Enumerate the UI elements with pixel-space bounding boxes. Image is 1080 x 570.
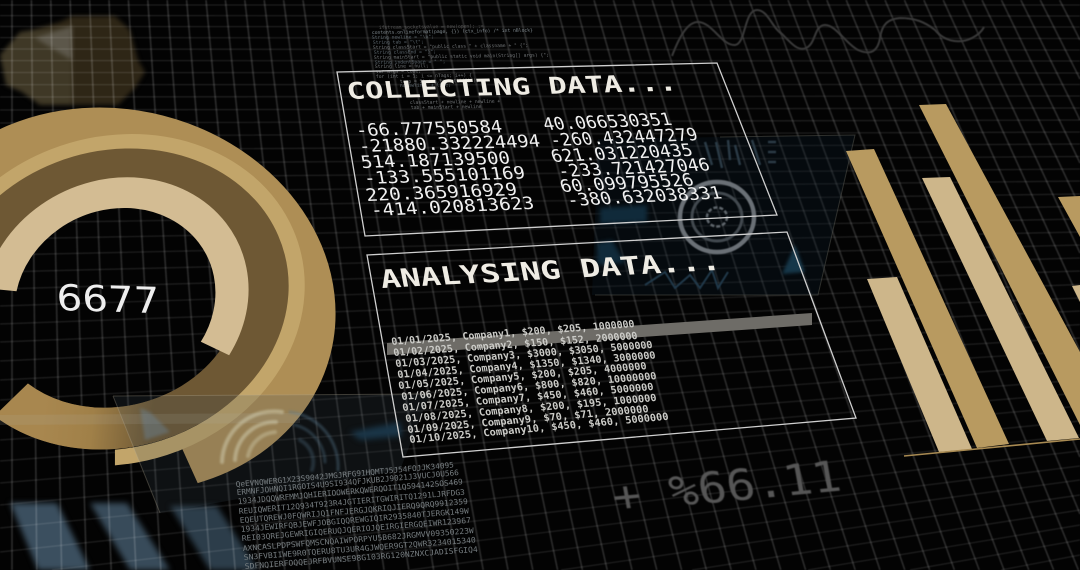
random data text block bottom centre bbox=[235, 460, 479, 570]
donut value: 6677 bbox=[56, 278, 160, 322]
ring: outer gold band bbox=[0, 81, 357, 519]
top-left faded gold blob bbox=[0, 16, 145, 105]
heading: collecting data: COLLECTING DATA... bbox=[345, 71, 679, 105]
small code text top centre: String mainStart = "public static void main(String[] args) {"; bbox=[374, 52, 549, 61]
bar: tall gold 2 bbox=[919, 104, 1080, 425]
ring: light gold band bbox=[0, 97, 355, 503]
small code text top centre: String indentSpace = " "; bbox=[375, 59, 446, 66]
bar: light 1 bbox=[867, 277, 972, 452]
small code text top centre: String newline = "\n"; bbox=[372, 34, 434, 41]
small code text top centre: tab + mainStart + newline bbox=[411, 104, 482, 111]
panel: analysing data bbox=[367, 232, 856, 457]
small code text top centre: for (int i = 1; i <= nTags; i++) { bbox=[376, 73, 472, 80]
wave line top right bbox=[672, 10, 984, 56]
ring: dark brown band bbox=[0, 133, 314, 465]
number list left column: -133.555101169 bbox=[362, 164, 527, 189]
small code text top centre: String tab = "\t"; bbox=[373, 39, 424, 46]
heading: analysing data: ANALYSING DATA... bbox=[377, 247, 723, 294]
number list left column bbox=[354, 117, 542, 221]
data table rows: 01/10/2025, Company10, $450, $460, 5000000 bbox=[409, 412, 670, 446]
small code text top centre: var args = code; bbox=[376, 68, 421, 75]
bar chart right bbox=[846, 104, 1080, 456]
bar: tall gold 1 bbox=[846, 149, 1009, 448]
number list left column: 514.187139500 bbox=[359, 149, 512, 173]
random data text block bottom centre: EQEUTQREWJ0FQWRIJQ1FNFJERGJQKRIQJIERQ9QRQ9912359 bbox=[239, 497, 469, 525]
small code text top centre: String classEnd = "}"; bbox=[374, 49, 436, 56]
number list right column: 60.099795526 bbox=[557, 171, 697, 197]
small code text top centre: String classStart = "public class " + classname + " {"; bbox=[373, 43, 529, 51]
number list right column: -380.632038331 bbox=[564, 184, 725, 211]
small code text top centre: ifstream_socketsvalue = new(open); ;> bbox=[379, 23, 484, 31]
percentage readout: + %66.11 bbox=[608, 453, 845, 523]
random data text block bottom centre: REI03QREJGEWRIGIQERUQJQERIOJQEIRGIERGQEIWR123967 bbox=[241, 516, 472, 543]
number list left column: -66.777550584 bbox=[354, 117, 504, 141]
blurred blue bars bottom-left bbox=[10, 503, 258, 570]
highlighted row bar bbox=[387, 313, 812, 355]
ring: lightest inner band bbox=[0, 182, 253, 420]
random data text block bottom centre: 1934JDQQWRFMMJQHIERIOOWERKQWERQOIT1Q594142SOS469 bbox=[237, 477, 464, 506]
icon: top squiggle glyphs bbox=[705, 140, 776, 168]
data table rows: 01/08/2025, Company8, $200, $195, 1000000 bbox=[405, 393, 658, 425]
data table rows: 01/09/2025, Company9, $70, $71, 2000000 bbox=[407, 404, 650, 436]
number list right column: -260.432447279 bbox=[547, 125, 701, 151]
number list left column: 220.365916929 bbox=[364, 180, 519, 206]
number list right column: -233.721427046 bbox=[555, 156, 713, 182]
random data text block bottom centre: REUIQWERIT12Q934T923R4JGTIERITGWIRITQ1291LJRFDG3 bbox=[238, 488, 466, 516]
random data text block bottom centre: AXNCASLPDPSWFQMSCNQAIWPORPYU5B682JRGMVV09350223W bbox=[242, 526, 475, 553]
data table rows: 01/04/2025, Company4, $1350, $1340, 3000000 bbox=[397, 350, 657, 381]
small code text top centre: classStart + newline + newline + bbox=[410, 99, 501, 106]
small code text top centre: temp = String.Format("{0}"); bbox=[400, 78, 479, 85]
data table rows: 01/03/2025, Company3, $3000, $3050, 5000000 bbox=[395, 340, 654, 370]
bar: gold right edge bbox=[1058, 196, 1080, 237]
random data text block bottom centre: QeEVNQWERG1X23S9042JMGJRFG91HQMTJ5J54FOJJK34095 bbox=[235, 460, 454, 489]
icon: concentric target bbox=[680, 182, 754, 252]
bar: light right edge bbox=[1072, 285, 1080, 302]
random data text block bottom centre: ERMNFJOHNQI1RGOIS4U9SI934QFJKUB2J9021J3VUCJ0U566 bbox=[236, 468, 460, 497]
data table rows: 01/06/2025, Company6, $800, $820, 10000000 bbox=[401, 371, 658, 403]
chart baseline bbox=[904, 439, 1080, 456]
icon: radar rings bbox=[222, 411, 338, 470]
data table rows: 01/01/2025, Company1, $200, $205, 1000000 bbox=[391, 319, 636, 348]
small code text top centre: String line = null; bbox=[375, 63, 429, 70]
ring: gold tail of brown band bbox=[0, 169, 277, 429]
icon: small line chart bbox=[645, 270, 728, 288]
number list left column: -21880.332224494 bbox=[357, 132, 542, 157]
random data text block bottom centre: SN3FVBIIWE9R0TQERU8TU3UR4GJWQER9GT2QWR3234015340 bbox=[243, 535, 477, 562]
small code text top centre: nonewline, + line; bbox=[400, 82, 451, 89]
donut chart bbox=[0, 81, 357, 519]
data table rows: 01/05/2025, Company5, $200, $205, 4000000 bbox=[398, 361, 648, 392]
number list right column: 40.066530351 bbox=[540, 110, 675, 135]
random data text block bottom centre: 1934JEWIRFQBJEWFJOBGIQQREWGIQIR2935840TJERGK149W bbox=[240, 506, 470, 534]
data table rows: 01/02/2025, Company2, $150, $152, 2000000 bbox=[393, 331, 639, 359]
small code text top centre bbox=[372, 23, 549, 111]
number list left column: -414.020813623 bbox=[369, 194, 536, 221]
data table rows bbox=[391, 319, 670, 446]
panel: collecting data bbox=[337, 63, 777, 236]
translucent holographic panel bottom left bbox=[0, 394, 430, 513]
holographic panel centre right bbox=[592, 135, 855, 295]
number list right column bbox=[540, 110, 725, 211]
data table rows: 01/07/2025, Company7, $450, $460, 5000000 bbox=[402, 382, 655, 414]
small code text top centre: contents.onlineformat(page, {}) (ctx_info) /* int nBlock} bbox=[372, 28, 533, 36]
bar: light 2 bbox=[922, 177, 1079, 441]
number list right column: 621.031220435 bbox=[548, 141, 696, 167]
